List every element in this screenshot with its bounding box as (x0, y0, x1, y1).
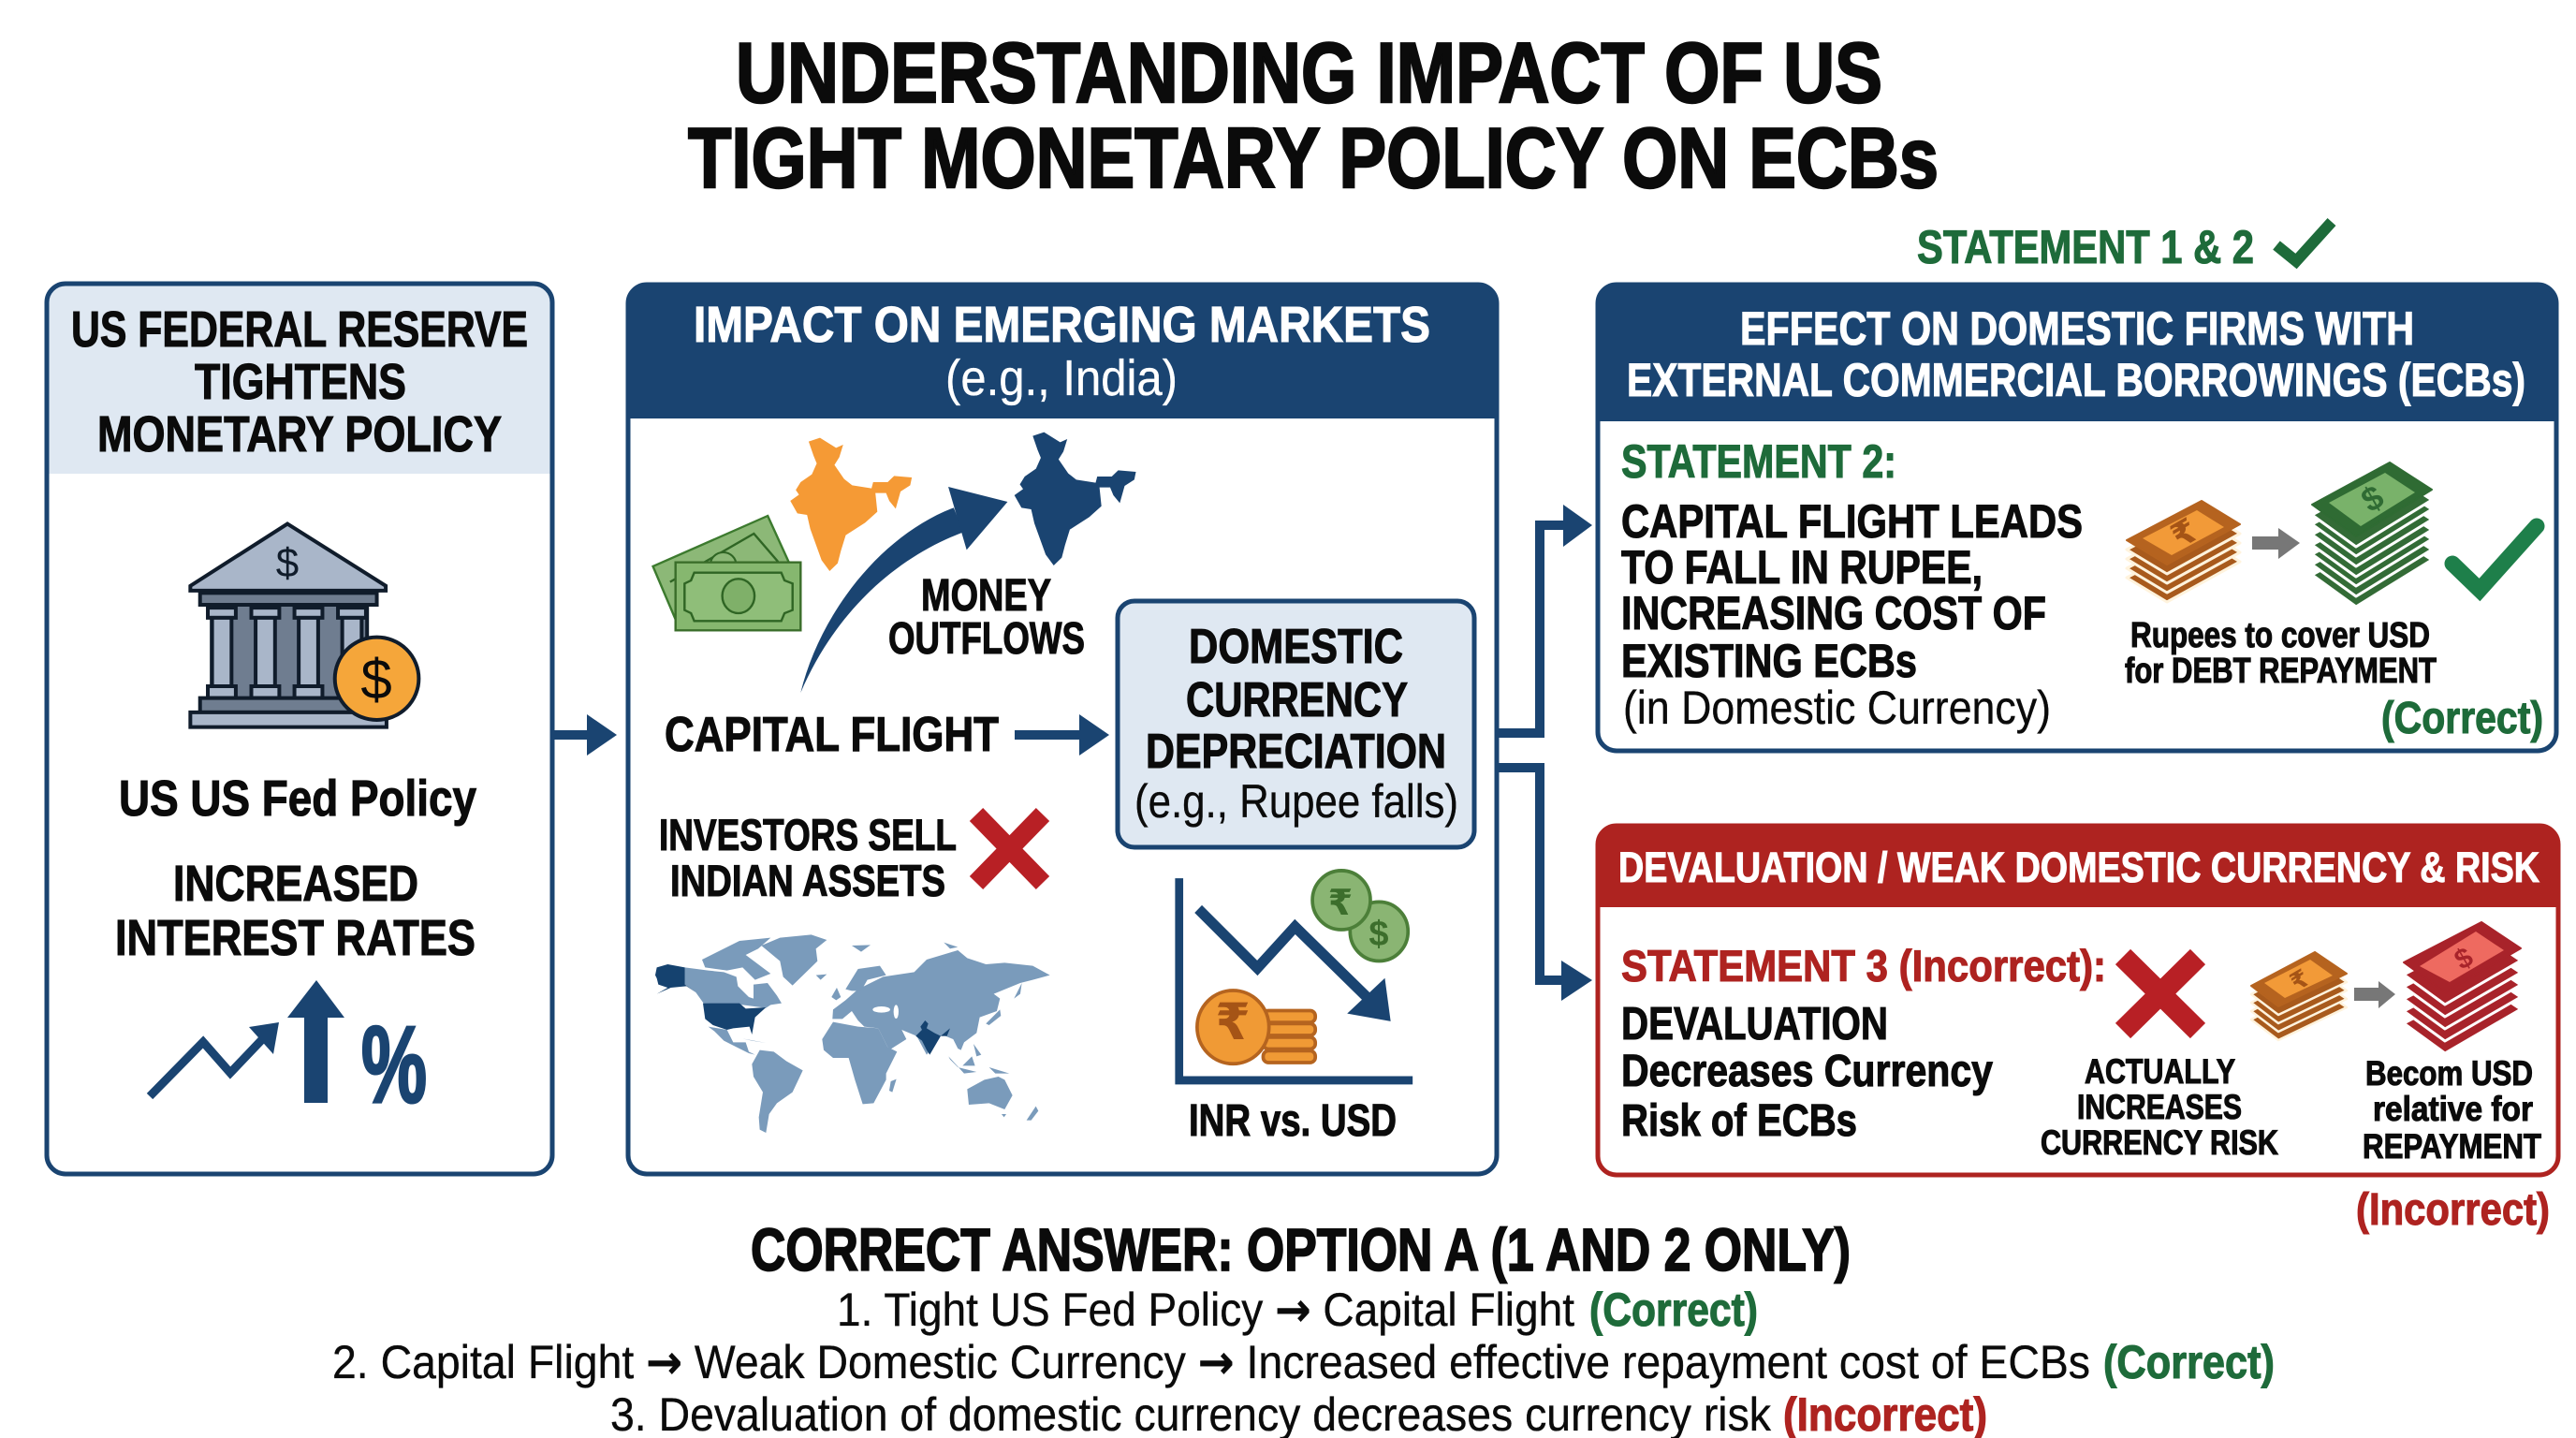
increased interest rates label: INCREASED (173, 856, 418, 912)
become USD caption: REPAYMENT (2363, 1127, 2541, 1166)
icon: rupee stack: ₹ (2164, 510, 2203, 555)
actually increases caption (2041, 1052, 2278, 1162)
money outflows label: OUTFLOWS (888, 614, 1085, 664)
chart currency symbols: ₹ (1215, 994, 1251, 1050)
domestic currency depreciation box: (e.g., Rupee falls) (1134, 775, 1458, 828)
icon: red cross (976, 814, 1043, 883)
statement 1 and 2 badge: STATEMENT 1 & 2 (1917, 221, 2254, 273)
icon: central bank with dollar coin (190, 524, 418, 727)
arrow: depreciation to devaluation risk (1498, 768, 1592, 1001)
chart currency symbols: ₹ (1328, 884, 1353, 923)
statement 3 text (1621, 999, 1993, 1146)
panel: effect on domestic firms (1597, 283, 2557, 751)
icon: rising rates: % (361, 1004, 427, 1125)
arrow: grey conversion (2252, 528, 2300, 559)
actually increases caption: INCREASES (2077, 1088, 2242, 1126)
rupees to cover caption (2125, 616, 2437, 691)
icon: India map orange (790, 438, 912, 571)
icon: dollar bills (653, 516, 800, 630)
statement 2 text: CAPITAL FLIGHT LEADS (1621, 495, 2083, 548)
title (688, 26, 1939, 206)
answer line 1: 1. Tight US Fed Policy → Capital Flight (837, 1283, 1574, 1337)
panel 3 heading: EFFECT ON DOMESTIC FIRMS WITH (1740, 302, 2414, 355)
panel 4 border (1598, 826, 2558, 1175)
statement 2 text: (in Domestic Currency) (1623, 682, 2051, 734)
answer line 2: 2. Capital Flight → Weak Domestic Currency → Increased effective repayment cost of ECBs (332, 1335, 2090, 1389)
icon: central bank with dollar coin: $ (276, 540, 299, 586)
answer line 1: (Correct) (1589, 1284, 1758, 1336)
arrow: grey conversion small (2354, 981, 2395, 1008)
panel 1 heading: MONETARY POLICY (97, 406, 502, 462)
capital flight label: CAPITAL FLIGHT (665, 708, 999, 762)
answer line 2: (Correct) (2103, 1336, 2275, 1388)
panel 2 heading: IMPACT ON EMERGING MARKETS (694, 297, 1430, 353)
panel 3 header background (1597, 283, 2557, 421)
increased interest rates label (115, 856, 476, 966)
arrow: depreciation to domestic firms (1498, 505, 1592, 733)
title: TIGHT MONETARY POLICY ON ECBs (688, 111, 1939, 206)
domestic currency depreciation box: CURRENCY (1186, 673, 1408, 727)
investors sell label: INVESTORS SELL (659, 810, 957, 859)
icon: small rupee stack: ₹ (2285, 963, 2314, 996)
icon: central bank with dollar coin: $ (360, 648, 392, 711)
panel: impact on emerging markets (627, 285, 1497, 1174)
icon: India map navy (1015, 433, 1136, 565)
icon: red dollar stack (2404, 922, 2521, 1053)
become USD caption (2363, 1054, 2541, 1166)
statement 2 heading: STATEMENT 2: (1621, 435, 1896, 488)
statement 2 text: INCREASING COST OF (1621, 587, 2046, 639)
panel 1 heading: TIGHTENS (195, 354, 406, 410)
rupees to cover caption: for DEBT REPAYMENT (2125, 652, 2437, 691)
statement 3 heading: STATEMENT 3 (Incorrect): (1621, 941, 2106, 990)
panel 4 header background (1597, 824, 2559, 907)
world map (655, 934, 1050, 1133)
actually increases caption: CURRENCY RISK (2041, 1123, 2278, 1162)
arrow: panel 1 to panel 2 (554, 714, 617, 756)
money outflows label: MONEY (921, 571, 1051, 621)
icon: large red cross (2123, 957, 2198, 1031)
rupees to cover caption: Rupees to cover USD (2130, 616, 2430, 655)
statement 2 text (1621, 495, 2083, 734)
statement 2 text: TO FALL IN RUPEE, (1621, 541, 1983, 594)
panel 2 heading (694, 297, 1430, 406)
panel 1 border (47, 284, 552, 1174)
become USD caption: relative for (2373, 1090, 2533, 1128)
chart currency symbols: $ (1368, 915, 1389, 954)
statement 3 text: DEVALUATION (1621, 999, 1888, 1049)
chart currency symbols (1215, 884, 1389, 1050)
US Fed policy label: US US Fed Policy (119, 770, 476, 827)
icon: red dollar stack: $ (2450, 942, 2479, 976)
INR vs USD label: INR vs. USD (1189, 1096, 1397, 1146)
panel: devaluation and risk (1597, 824, 2559, 1175)
statement 3 text: Risk of ECBs (1621, 1096, 1857, 1146)
domestic currency depreciation box: DEPRECIATION (1146, 725, 1446, 779)
panel 2 heading: (e.g., India) (945, 350, 1178, 406)
panel 2 header background (627, 286, 1497, 418)
icon: rising rates (150, 980, 427, 1125)
incorrect label: (Incorrect) (2356, 1185, 2550, 1235)
icon: dollar stack: $ (2354, 477, 2390, 520)
domestic currency depreciation box: DOMESTIC (1189, 620, 1403, 674)
domestic currency depreciation box (1118, 601, 1474, 847)
investors sell label: INDIAN ASSETS (670, 856, 945, 905)
become USD caption: Becom USD (2365, 1054, 2533, 1093)
panel 2 border (628, 285, 1497, 1174)
statement 2 text: EXISTING ECBs (1621, 635, 1917, 687)
panel 3 heading (1627, 302, 2525, 406)
arrow: money outflows curve (800, 487, 1007, 693)
panel 3 border (1598, 285, 2556, 751)
increased interest rates label: INTEREST RATES (115, 910, 476, 966)
icon: rupee stack (2127, 501, 2240, 602)
panel 1 heading (71, 301, 528, 462)
icon: green check (2452, 526, 2537, 590)
money outflows label (888, 571, 1085, 664)
investors sell label (659, 810, 957, 905)
panel 1 heading: US FEDERAL RESERVE (71, 301, 528, 358)
actually increases caption: ACTUALLY (2085, 1052, 2235, 1091)
title: UNDERSTANDING IMPACT OF US (736, 26, 1882, 121)
panel 1 header background (47, 285, 552, 474)
icon: small rupee stack (2251, 952, 2347, 1040)
icon: dollar stack (2312, 462, 2432, 607)
panel: US Federal Reserve (47, 284, 552, 1174)
correct answer heading: CORRECT ANSWER: OPTION A (1 AND 2 ONLY) (751, 1216, 1851, 1284)
statement 3 text: Decreases Currency (1621, 1047, 1993, 1096)
correct label: (Correct) (2381, 694, 2543, 743)
arrow: capital flight to depreciation (1015, 714, 1109, 756)
chart: INR vs USD falling (1179, 871, 1412, 1080)
